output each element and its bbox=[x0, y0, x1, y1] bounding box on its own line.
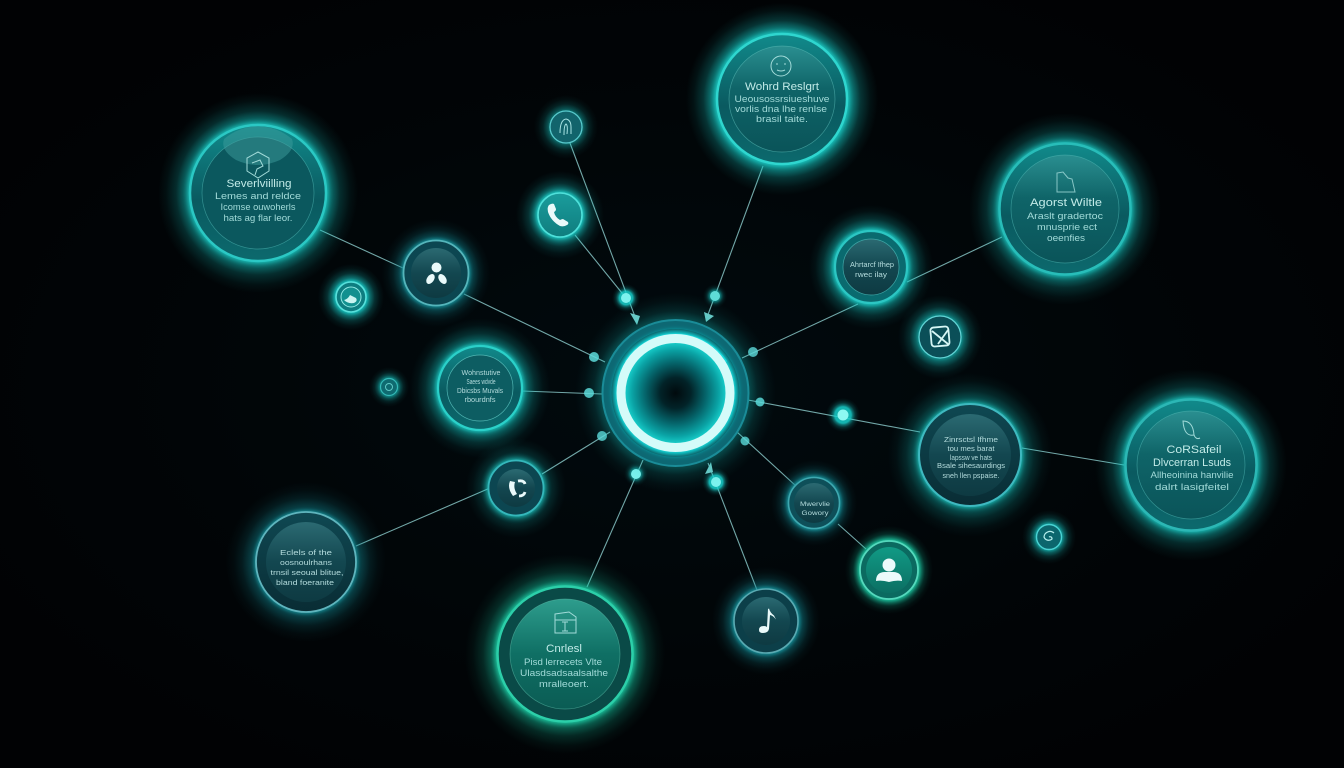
icon node: call arrows bbox=[466, 438, 566, 538]
connector: bottom bubble to hub bbox=[587, 460, 643, 587]
icon: open box bbox=[555, 612, 576, 633]
icon: document stack bbox=[1057, 172, 1075, 192]
connector: phone node to hub bbox=[575, 235, 626, 298]
panel: right bubble bbox=[969, 113, 1161, 305]
icon node: chat bubble bbox=[318, 264, 384, 330]
panel: right middle bubble bbox=[888, 373, 1052, 537]
panel: top bubble: Ueousossrsiueshuve bbox=[734, 94, 830, 105]
panel: bottom green bubble: Cnrlesl bbox=[546, 643, 582, 655]
central hub ring bbox=[576, 293, 776, 493]
connector dots and arrowheads bbox=[584, 284, 860, 496]
panel: right middle bubble: lapssw ve hats bbox=[950, 453, 992, 462]
panel: right bubble: Agorst Wiltle bbox=[1030, 197, 1102, 209]
connector: lower left bubble to hub bbox=[356, 432, 610, 546]
panel: far right bubble: CoRSafeil bbox=[1166, 444, 1222, 456]
panel: upper left bubble: Severlviilling bbox=[226, 178, 292, 190]
panel: upper right small bubble bbox=[809, 205, 933, 329]
connector: user node to hub bbox=[737, 432, 866, 549]
panel: bottom green bubble: mralleoert. bbox=[539, 679, 589, 690]
panel: right middle bubble: sneh llen pspaise. bbox=[942, 471, 1000, 480]
connector: far right bubble to hub bbox=[748, 400, 1124, 465]
panel: left middle bubble: rbourdnfs bbox=[464, 395, 496, 404]
panel: bottom green bubble: Ulasdsadsaalsalthe bbox=[520, 668, 608, 679]
connector: music node to hub bbox=[708, 463, 757, 590]
panel: far right bubble: Allheoinina hanvilie bbox=[1150, 470, 1234, 481]
panel: upper right small bubble: rwec ilay bbox=[855, 270, 887, 279]
icon: face badge bbox=[771, 56, 791, 76]
panel: upper left bubble: Lemes and reldce bbox=[215, 191, 301, 202]
icon node: small dot bbox=[369, 367, 409, 407]
panel: lower left bubble: oosnoulrhans bbox=[280, 558, 332, 567]
panel: right bubble: Araslt gradertoc bbox=[1027, 211, 1103, 222]
panel: bottom green bubble: Pisd lerrecets Vlte bbox=[524, 657, 602, 668]
panel: lower right text node bbox=[771, 460, 857, 546]
panel: lower left bubble: Eclels of the bbox=[280, 548, 332, 557]
panel: left middle bubble: Dbicsbs Muvals bbox=[457, 386, 503, 395]
connector: upper left bubble to hub bbox=[320, 230, 605, 362]
panel: upper left bubble: Icomse ouwoherls bbox=[220, 202, 296, 213]
panel: top bubble: Wohrd Reslgrt bbox=[745, 81, 819, 93]
panel: right middle bubble: Zinrsctsl Ifhme bbox=[944, 435, 998, 444]
icon node: envelope box bbox=[898, 295, 982, 379]
icon node: user profile bbox=[845, 526, 933, 614]
panel: top bubble bbox=[686, 3, 878, 195]
panel: lower left bubble bbox=[226, 482, 386, 642]
panel: bottom green bubble bbox=[465, 554, 665, 754]
panel: lower left bubble: bland foeranite bbox=[276, 578, 334, 587]
panel: right middle bubble: tou mes barat bbox=[948, 444, 995, 453]
panel: upper right small bubble: Ahrtarcf Ifhep bbox=[850, 260, 894, 269]
icon node: people bbox=[382, 219, 490, 327]
panel: right bubble: mnusprie ect bbox=[1037, 222, 1097, 233]
icon node: fingerprint bbox=[534, 95, 598, 159]
panel: right middle bubble: Bsale sihesaurdings bbox=[937, 461, 1005, 470]
icon: leaf bbox=[1183, 421, 1200, 439]
icon node: phone bbox=[516, 171, 604, 259]
panel: upper left bubble bbox=[158, 93, 358, 293]
connector: right bubble to hub bbox=[742, 237, 1002, 358]
panel: left middle bubble: Wohnstutive bbox=[462, 368, 500, 377]
panel: far right bubble bbox=[1095, 369, 1287, 561]
panel: top bubble: brasil taite. bbox=[756, 114, 808, 125]
panel: top bubble: vorlis dna lhe renlse bbox=[735, 104, 827, 115]
connector: fingerprint node to hub bbox=[570, 143, 637, 322]
panel: far right bubble: dalrt lasigfeitel bbox=[1155, 482, 1229, 493]
panel: lower left bubble: trnsil seoual blitue, bbox=[270, 568, 344, 577]
panel: right bubble: oeenfies bbox=[1047, 233, 1085, 244]
panel: left middle bubble: Saees wdvde bbox=[466, 377, 496, 386]
icon node: music note bbox=[712, 567, 820, 675]
icon node: spiral bbox=[1022, 510, 1076, 564]
panel: far right bubble: Dlvcerran Lsuds bbox=[1153, 457, 1231, 469]
panel: upper left bubble: hats ag flar leor. bbox=[224, 213, 292, 224]
connector: left bubble to hub bbox=[522, 391, 602, 394]
icon: hexagon box bbox=[247, 152, 269, 178]
panel: lower right text node: Mwervlie bbox=[800, 501, 830, 508]
connector: top bubble to hub bbox=[706, 166, 763, 320]
panel: left middle bubble bbox=[410, 318, 550, 458]
panel: lower right text node: Gowory bbox=[802, 510, 829, 517]
